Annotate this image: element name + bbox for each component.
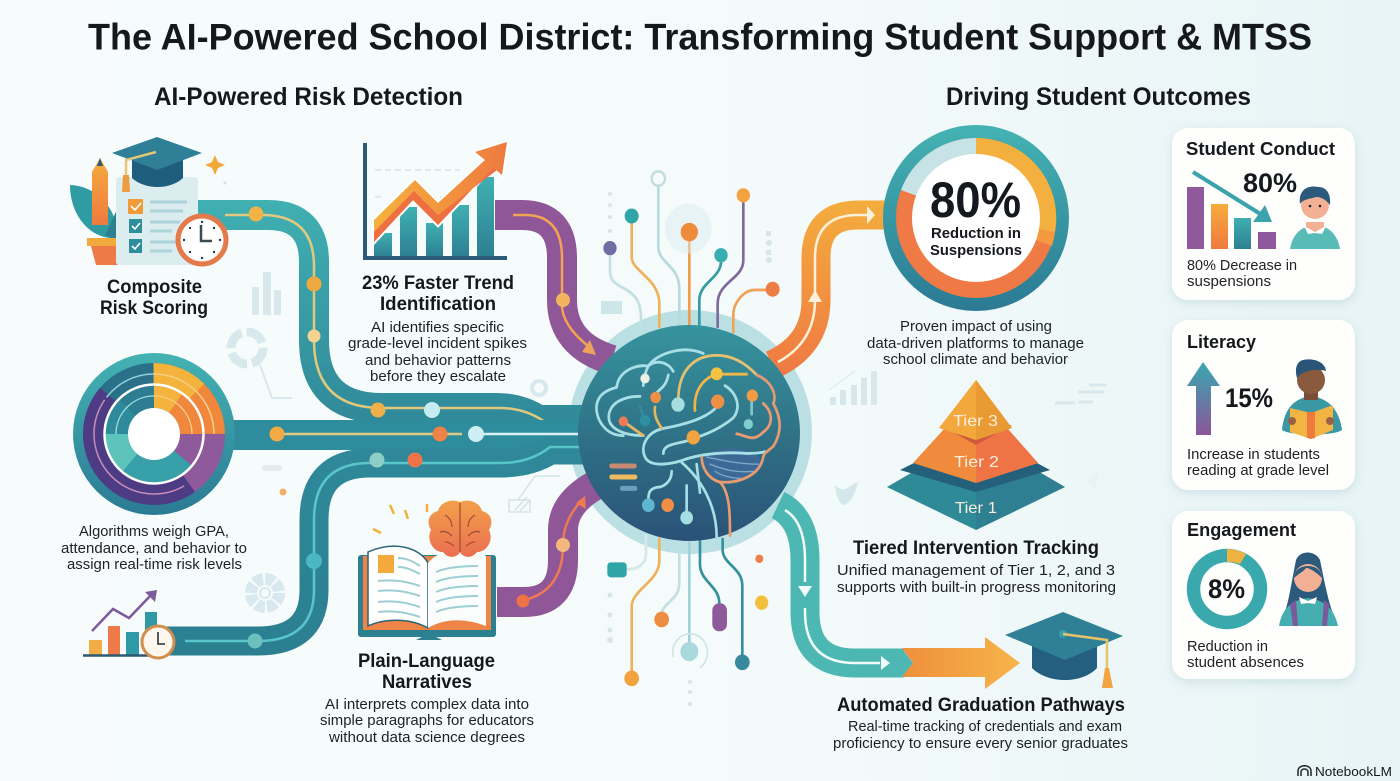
text: automated graduation pathways: Automated Graduation Pathways (837, 695, 1125, 716)
panel: literacy (1172, 320, 1355, 490)
panel: student conduct: 80% Decrease in (1187, 258, 1297, 274)
panel: literacy: reading at grade level (1187, 463, 1329, 479)
text: plain-language narratives: simple paragraphs for educators (320, 713, 534, 729)
pipe: narratives timeline to brain (150, 447, 590, 648)
text: algorithms description: Algorithms weigh GPA, (79, 524, 229, 540)
text: 23% faster trend identification: 23% Faster Trend (362, 273, 514, 294)
central AI brain hub (578, 171, 800, 686)
text: plain-language narratives: without data science degrees (328, 730, 525, 746)
circuit tendrils (610, 186, 770, 671)
label: Composite Risk Scoring: Composite (107, 277, 202, 298)
text: proven impact: data-driven platforms to manage (867, 336, 1084, 352)
panel: engagement (1172, 511, 1355, 679)
brain hub halo ring (568, 310, 812, 554)
chart: tier pyramid (887, 380, 1065, 530)
text: algorithms description: assign real-time risk levels (67, 557, 242, 573)
text: plain-language narratives: Narratives (382, 672, 472, 693)
chart: 80% reduction donut: Suspensions (930, 243, 1022, 259)
text: plain-language narratives: Plain-Language (358, 651, 495, 672)
pipe: trend identification to brain (495, 215, 612, 360)
text: automated graduation pathways: Real-time tracking of credentials and exam (848, 719, 1122, 735)
text: proven impact: school climate and behavior (883, 352, 1068, 368)
panel: engagement: Reduction in (1187, 639, 1268, 655)
faint background icons (231, 192, 1106, 706)
text: 23% faster trend identification (348, 273, 527, 385)
text: tiered intervention tracking (837, 538, 1116, 596)
icon: graduation cap (1005, 612, 1123, 688)
chart: 80% reduction donut (883, 125, 1069, 311)
label: Composite Risk Scoring (100, 277, 208, 319)
panel: student conduct: 80% (1243, 168, 1297, 198)
icon: small trend chart with clock (83, 590, 174, 658)
panel: literacy: Literacy (1187, 332, 1256, 352)
pipe and arrow: brain to graduation pathways (778, 505, 1020, 689)
pipe: plain-language narratives to brain (497, 478, 610, 608)
panel: engagement: Engagement (1187, 520, 1296, 540)
panel: student conduct: Student Conduct (1186, 139, 1335, 159)
chart: tier pyramid: Tier 3 (953, 413, 998, 430)
label: Composite Risk Scoring: Risk Scoring (100, 298, 208, 319)
text: proven impact (867, 319, 1084, 368)
text: plain-language narratives (320, 651, 534, 746)
title: The AI-Powered School District: Transforming Student Support & MTSS (88, 16, 1312, 58)
text: automated graduation pathways (833, 695, 1128, 752)
heading: AI-Powered Risk Detection: AI-Powered Risk Detection (154, 83, 463, 111)
text: proven impact: Proven impact of using (900, 319, 1052, 335)
text: 23% faster trend identification: AI identifies specific (371, 320, 504, 336)
chart: tier pyramid: Tier 2 (954, 454, 999, 471)
icon: open book with brain (358, 501, 496, 640)
text: 23% faster trend identification: grade-level incident spikes (348, 336, 527, 352)
text: 23% faster trend identification: Identification (380, 294, 496, 315)
text: algorithms description (61, 524, 247, 573)
panel: literacy: 15% (1225, 383, 1273, 413)
chart: 80% reduction donut: Reduction in (931, 226, 1021, 242)
panel: engagement: 8% (1208, 574, 1245, 604)
panel: engagement: student absences (1187, 655, 1304, 671)
panel: student conduct (1172, 128, 1355, 300)
heading: Driving Student Outcomes: Driving Student Outcomes (946, 83, 1251, 111)
pipe: algorithms to brain (230, 426, 590, 442)
chart: 80% reduction donut: 80% (930, 172, 1021, 228)
brain line art (596, 350, 780, 537)
icon: composite risk scoring checklist (70, 137, 226, 265)
chart: tier pyramid: Tier 1 (955, 500, 997, 517)
text: automated graduation pathways: proficiency to ensure every senior graduates (833, 736, 1128, 752)
text: tiered intervention tracking: supports with built-in progress monitoring (837, 580, 1116, 596)
watermark: NotebookLM: NotebookLM (1315, 764, 1392, 779)
pipe: brain to 80% reduction (772, 206, 890, 365)
panel: student conduct: suspensions (1187, 274, 1271, 290)
text: 23% faster trend identification: and behavior patterns (365, 353, 511, 369)
chart: 23% faster trend icon (365, 142, 507, 258)
text: plain-language narratives: AI interprets complex data into (325, 697, 529, 713)
text: 23% faster trend identification: before they escalate (370, 369, 506, 385)
text: tiered intervention tracking: Tiered Intervention Tracking (853, 538, 1099, 559)
text: algorithms description: attendance, and behavior to (61, 541, 247, 557)
chart: composite donut (73, 353, 235, 515)
pipe: composite risk scoring to brain (195, 206, 590, 422)
text: tiered intervention tracking: Unified management of Tier 1, 2, and 3 (837, 563, 1115, 579)
panel: literacy: Increase in students (1187, 447, 1320, 463)
